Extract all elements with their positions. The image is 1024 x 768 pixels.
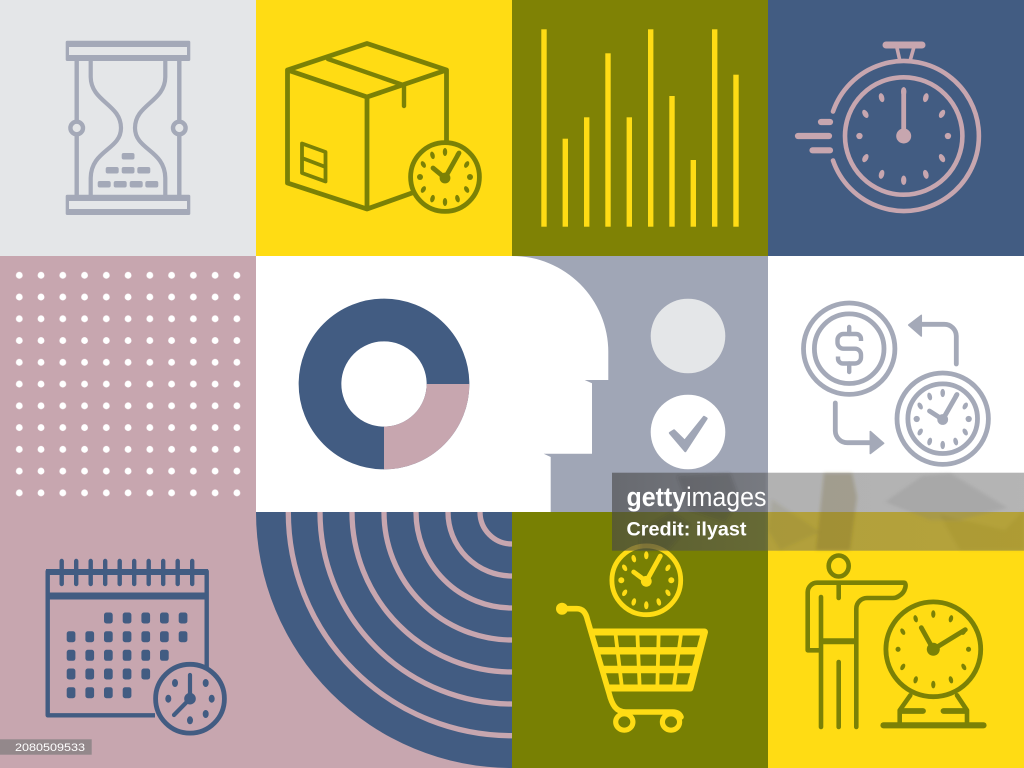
watermark logo text: gettyimages (626, 482, 766, 512)
arrow: clock to coin (909, 315, 956, 364)
icon: shopping cart (556, 603, 704, 730)
arrow: coin to clock (835, 403, 884, 454)
icon: cart clock (612, 546, 681, 615)
icon: calendar clock (156, 664, 224, 733)
icon: calendar (46, 561, 208, 715)
icon: stopwatch (798, 45, 979, 211)
panel: shopping cart (512, 512, 768, 768)
icon: person pointing (808, 556, 906, 727)
bar chart (541, 29, 739, 227)
panel: calendar (0, 512, 256, 768)
panel: person and clock (768, 512, 1024, 768)
panel: donut chart (256, 256, 512, 512)
panel: package (256, 0, 512, 256)
head silhouette (512, 256, 608, 512)
icon: exchange clock (897, 373, 988, 464)
watermark credit text: Credit: ilyast (626, 518, 747, 540)
panel: money and time exchange (768, 256, 1024, 512)
panel: bar chart (512, 0, 768, 256)
panel: dot pattern (0, 256, 256, 512)
panel: head profile (512, 256, 768, 512)
panel: concentric arcs (256, 512, 512, 768)
image id tag (0, 739, 92, 755)
panel: stopwatch (768, 0, 1024, 256)
icon: table clock (884, 602, 984, 725)
icon: hourglass (66, 41, 190, 215)
donut chart (320, 320, 448, 448)
concentric quarter circle (256, 512, 512, 768)
image id tag: 2080509533 (15, 742, 85, 754)
icon: cardboard box (288, 44, 446, 209)
empty option circle (651, 299, 725, 373)
icon: box clock (411, 143, 479, 211)
checked option circle (651, 395, 725, 469)
panel: hourglass (0, 0, 256, 256)
watermark band (612, 473, 1024, 551)
icon: dollar coin (804, 303, 895, 394)
